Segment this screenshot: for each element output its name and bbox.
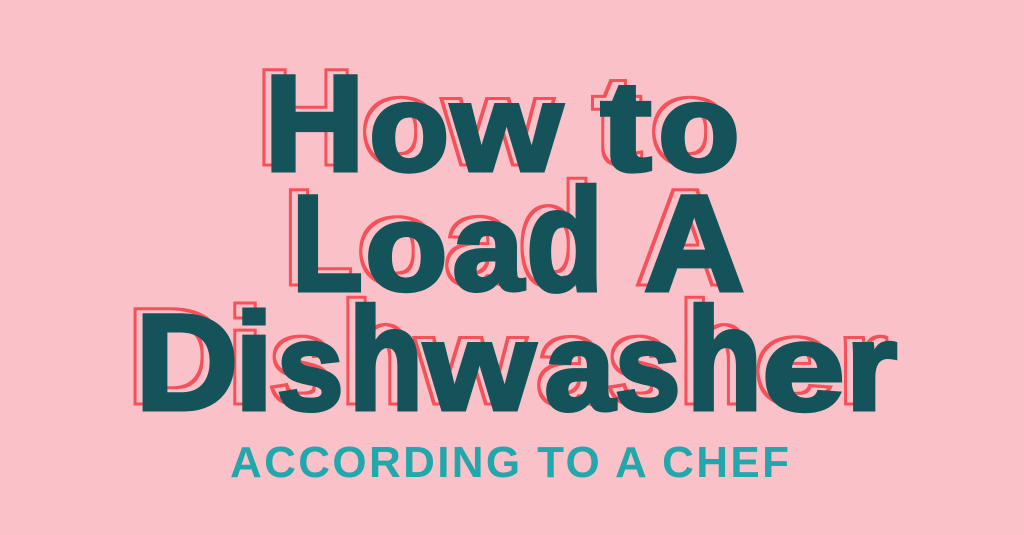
title: How to Load A Dishwasher: H	[264, 48, 365, 200]
title outline: red offset layer: i	[226, 279, 265, 433]
title outline: red offset layer: H	[255, 42, 356, 194]
title outline: red offset layer: t	[592, 49, 643, 192]
title: How to Load A Dishwasher: a	[452, 178, 525, 317]
title: How to Load A Dishwasher: L	[292, 167, 363, 320]
title: How to Load A Dishwasher: w	[450, 59, 563, 197]
title outline: red offset layer: d	[517, 152, 595, 315]
title: How to Load A Dishwasher: A	[644, 168, 745, 320]
title outline: red offset layer: A	[635, 162, 736, 314]
title outline: red offset layer: L	[283, 161, 354, 314]
title: How to Load A Dishwasher: o	[369, 59, 449, 198]
title: How to Load A Dishwasher: w	[423, 298, 536, 436]
title: How to Load A Dishwasher: r	[846, 298, 897, 437]
title: How to Load A Dishwasher	[135, 48, 897, 441]
title: How to Load A Dishwasher: e	[762, 299, 845, 437]
title: How to Load A Dishwasher: s	[615, 297, 681, 437]
title: How to Load A Dishwasher: h	[686, 277, 762, 441]
title: How to Load A Dishwasher: s	[277, 297, 344, 436]
title: How to Load A Dishwasher: h	[348, 277, 423, 441]
title outline: red offset layer: a	[444, 172, 516, 311]
title outline: red offset layer: e	[753, 293, 836, 431]
title outline: red offset layer: s	[268, 291, 335, 430]
title: How to Load A Dishwasher: D	[135, 285, 238, 439]
title outline: red offset layer	[126, 42, 888, 435]
title outline: red offset layer: r	[837, 292, 888, 431]
title outline: red offset layer: o	[649, 53, 731, 191]
title outline: red offset layer: a	[536, 292, 607, 431]
title: How to Load A Dishwasher: d	[526, 158, 604, 321]
title: How to Load A Dishwasher: a	[544, 298, 616, 437]
subtitle: ACCORDING TO A CHEF	[230, 438, 789, 487]
title outline: red offset layer: w	[414, 292, 527, 430]
title: How to Load A Dishwasher: o	[658, 59, 740, 197]
title outline: red offset layer: D	[126, 279, 229, 433]
title outline: red offset layer: h	[678, 271, 753, 435]
title outline: red offset layer: o	[356, 173, 439, 311]
title: How to Load A Dishwasher: t	[600, 55, 652, 198]
title: How to Load A Dishwasher: o	[365, 179, 448, 317]
title outline: red offset layer: h	[340, 271, 414, 435]
title: How to Load A Dishwasher: i	[234, 285, 274, 439]
title outline: red offset layer: w	[441, 53, 554, 191]
title outline: red offset layer: s	[606, 291, 672, 431]
title outline: red offset layer: o	[360, 53, 440, 192]
